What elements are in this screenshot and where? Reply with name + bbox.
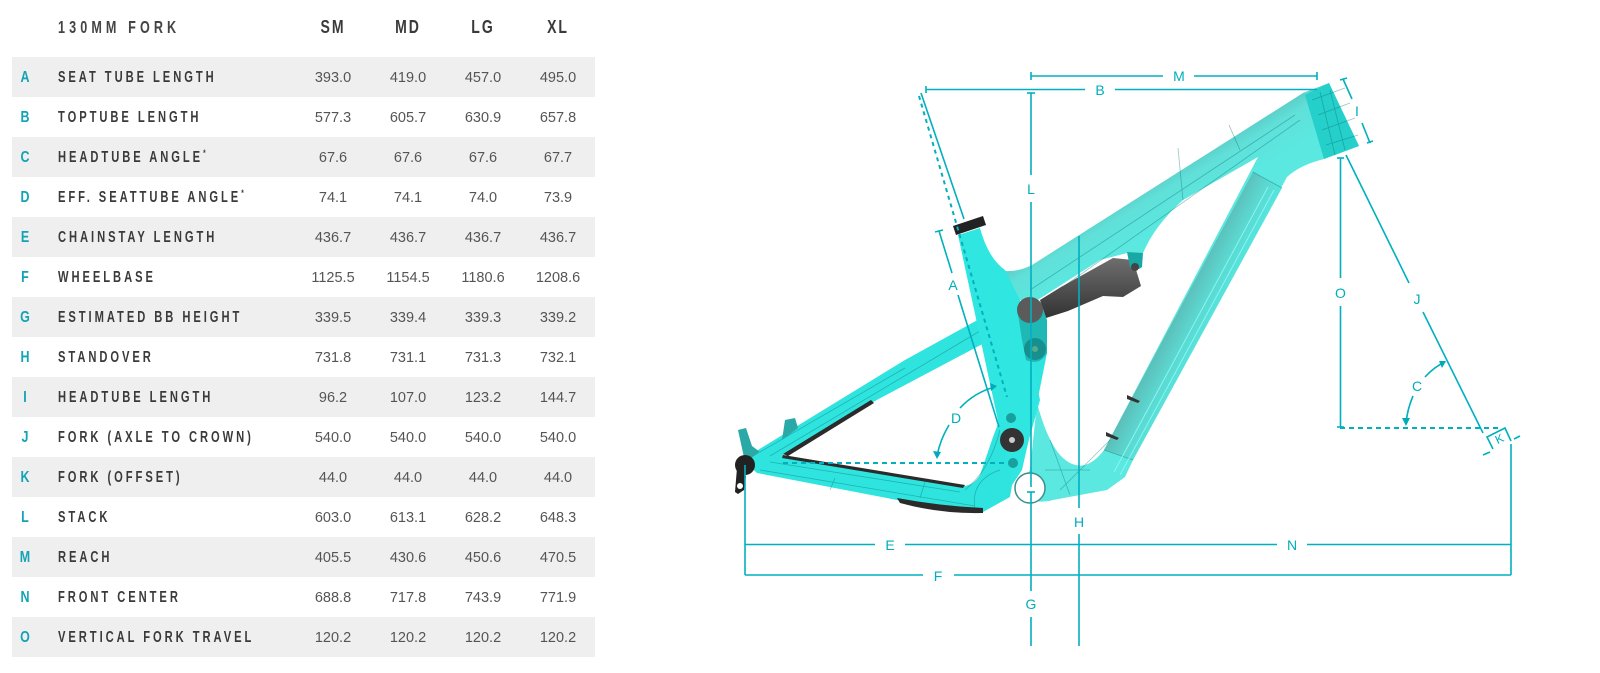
row H: standover: STANDOVER: [58, 349, 154, 366]
row J: fork axle to crown: FORK (AXLE TO CROWN): [58, 429, 254, 446]
row L: stack: L: [21, 509, 29, 526]
row N: front center: 743.9: [465, 590, 501, 606]
row H: standover: 731.3: [465, 350, 501, 366]
row N: front center: FRONT CENTER: [58, 589, 181, 606]
row D: effective seattube angle: 74.1: [319, 190, 347, 206]
row G: estimated BB height: 339.3: [465, 310, 501, 326]
row I: headtube length: 144.7: [540, 390, 576, 406]
cable guides: [1106, 395, 1140, 440]
row I: headtube length: I: [23, 389, 27, 406]
row L: stack: 628.2: [465, 510, 501, 526]
table header: 130MM FORK: [58, 17, 180, 37]
row C: headtube angle: HEADTUBE ANGLE*: [58, 148, 206, 166]
row L: stack: STACK: [58, 509, 110, 526]
dimension letters: [885, 68, 1506, 612]
table header: MD: [395, 17, 421, 37]
row E: chainstay length: E: [21, 229, 29, 246]
row I: headtube length: 107.0: [390, 390, 426, 406]
rear triangle: [738, 300, 1110, 513]
row C: headtube angle: 67.7: [544, 150, 572, 166]
row H: standover: 732.1: [540, 350, 576, 366]
row G: estimated BB height: [12, 297, 595, 337]
dimension letters: B: [1095, 82, 1105, 98]
row G: estimated BB height: 339.4: [390, 310, 426, 326]
table header: LG: [471, 17, 495, 37]
fins: [738, 418, 798, 462]
row M: reach: [12, 537, 595, 577]
rear dropout: [735, 455, 755, 494]
row O: vertical fork travel: O: [20, 629, 30, 646]
row E: chainstay length: 436.7: [315, 230, 351, 246]
row C: headtube angle: C: [20, 149, 30, 166]
row D: effective seattube angle: D: [20, 189, 30, 206]
row C: headtube angle: 67.6: [469, 150, 497, 166]
row B: toptube length: TOPTUBE LENGTH: [58, 109, 201, 126]
row F: wheelbase: 1208.6: [536, 270, 580, 286]
row E: chainstay length: 436.7: [540, 230, 576, 246]
dimension letters: K: [1493, 431, 1506, 447]
row D: effective seattube angle: 73.9: [544, 190, 572, 206]
row D: effective seattube angle: [20, 188, 572, 206]
dimension letters: M: [1173, 68, 1185, 84]
row H: standover: 731.8: [315, 350, 351, 366]
row L: stack: [21, 509, 576, 526]
row C: headtube angle: 67.6: [394, 150, 422, 166]
row F: wheelbase: WHEELBASE: [58, 269, 156, 286]
row I: headtube length: 123.2: [465, 390, 501, 406]
dimension letters: H: [1074, 514, 1084, 530]
row N: front center: 688.8: [315, 590, 351, 606]
row A: seat tube length: A: [20, 69, 30, 86]
row J: fork axle to crown: J: [22, 429, 28, 446]
dimension letters: N: [1287, 537, 1297, 553]
row B: toptube length: [20, 109, 576, 126]
row O: vertical fork travel: 120.2: [465, 630, 501, 646]
arrowheads: [933, 361, 1446, 459]
row G: estimated BB height: 339.2: [540, 310, 576, 326]
row A: seat tube length: 457.0: [465, 70, 501, 86]
row A: seat tube length: 393.0: [315, 70, 351, 86]
row K: fork offset: 44.0: [319, 470, 347, 486]
row E: chainstay length: 436.7: [465, 230, 501, 246]
row O: vertical fork travel: 120.2: [390, 630, 426, 646]
row K: fork offset: 44.0: [544, 470, 572, 486]
row A: seat tube length: 419.0: [390, 70, 426, 86]
row B: toptube length: B: [20, 109, 30, 126]
row F: wheelbase: [21, 269, 580, 286]
front triangle: [1005, 83, 1359, 502]
row O: vertical fork travel: 120.2: [315, 630, 351, 646]
row N: front center: N: [20, 589, 30, 606]
row M: reach: REACH: [58, 549, 112, 566]
rear shock: [1040, 252, 1143, 318]
row M: reach: M: [20, 549, 30, 566]
row C: headtube angle: 67.6: [319, 150, 347, 166]
dimension letters: O: [1335, 285, 1346, 301]
row H: standover: [20, 349, 576, 366]
dimension letters: C: [1412, 378, 1422, 394]
seat collar: [953, 216, 986, 235]
row G: estimated BB height: G: [20, 309, 30, 326]
dimension letters: J: [1414, 291, 1420, 307]
row M: reach: 470.5: [540, 550, 576, 566]
row J: fork axle to crown: 540.0: [315, 430, 351, 446]
bike frame: [735, 83, 1359, 513]
row O: vertical fork travel: [12, 617, 595, 657]
row J: fork axle to crown: 540.0: [390, 430, 426, 446]
table header: SM: [321, 17, 345, 37]
dimension letters: F: [934, 568, 942, 584]
row F: wheelbase: 1154.5: [386, 270, 430, 286]
rocker link and pivots: [1000, 297, 1047, 468]
row D: effective seattube angle: 74.1: [394, 190, 422, 206]
dimension letters: E: [885, 537, 895, 553]
row N: front center: 717.8: [390, 590, 426, 606]
row K: fork offset: K: [20, 469, 30, 486]
down tube: [1104, 172, 1282, 460]
row J: fork axle to crown: 540.0: [465, 430, 501, 446]
row H: standover: 731.1: [390, 350, 426, 366]
row L: stack: 603.0: [315, 510, 351, 526]
row K: fork offset: FORK (OFFSET): [58, 469, 183, 486]
bottom bracket: [1015, 473, 1045, 503]
dimension letters: L: [1027, 181, 1035, 197]
row C: headtube angle: [12, 137, 595, 177]
row B: toptube length: 577.3: [315, 110, 351, 126]
row J: fork axle to crown: [22, 429, 576, 446]
dimension letters: G: [1026, 596, 1036, 612]
row A: seat tube length: SEAT TUBE LENGTH: [58, 69, 217, 86]
row L: stack: 613.1: [390, 510, 426, 526]
dimension letters: D: [951, 410, 961, 426]
row I: headtube length: [12, 377, 595, 417]
row O: vertical fork travel: 120.2: [540, 630, 576, 646]
row N: front center: [20, 589, 576, 606]
row K: fork offset: [12, 457, 595, 497]
row E: chainstay length: [12, 217, 595, 257]
row B: toptube length: 630.9: [465, 110, 501, 126]
row M: reach: 405.5: [315, 550, 351, 566]
row J: fork axle to crown: 540.0: [540, 430, 576, 446]
seat tube: [958, 228, 1040, 482]
chain stay guards: [782, 400, 983, 513]
dimension letters: A: [948, 277, 958, 293]
row E: chainstay length: 436.7: [390, 230, 426, 246]
row M: reach: 450.6: [465, 550, 501, 566]
row F: wheelbase: 1180.6: [461, 270, 505, 286]
row E: chainstay length: CHAINSTAY LENGTH: [58, 229, 217, 246]
row H: standover: H: [20, 349, 30, 366]
table header: [58, 17, 569, 37]
row G: estimated BB height: 339.5: [315, 310, 351, 326]
row I: headtube length: 96.2: [319, 390, 347, 406]
row L: stack: 648.3: [540, 510, 576, 526]
row B: toptube length: 605.7: [390, 110, 426, 126]
row F: wheelbase: F: [21, 269, 29, 286]
row A: seat tube length: 495.0: [540, 70, 576, 86]
table header: XL: [547, 17, 569, 37]
row K: fork offset: 44.0: [469, 470, 497, 486]
row I: headtube length: HEADTUBE LENGTH: [58, 389, 213, 406]
dimension letters: I: [1355, 103, 1359, 119]
row D: effective seattube angle: EFF. SEATTUBE ANGLE*: [58, 188, 244, 206]
row F: wheelbase: 1125.5: [311, 270, 355, 286]
row B: toptube length: 657.8: [540, 110, 576, 126]
row G: estimated BB height: ESTIMATED BB HEIGHT: [58, 309, 242, 326]
head tube: [1305, 83, 1359, 159]
dimension lines: [745, 72, 1520, 646]
row O: vertical fork travel: VERTICAL FORK TRAVEL: [58, 629, 254, 646]
row N: front center: 771.9: [540, 590, 576, 606]
row K: fork offset: 44.0: [394, 470, 422, 486]
row A: seat tube length: [12, 57, 595, 97]
row D: effective seattube angle: 74.0: [469, 190, 497, 206]
row M: reach: 430.6: [390, 550, 426, 566]
